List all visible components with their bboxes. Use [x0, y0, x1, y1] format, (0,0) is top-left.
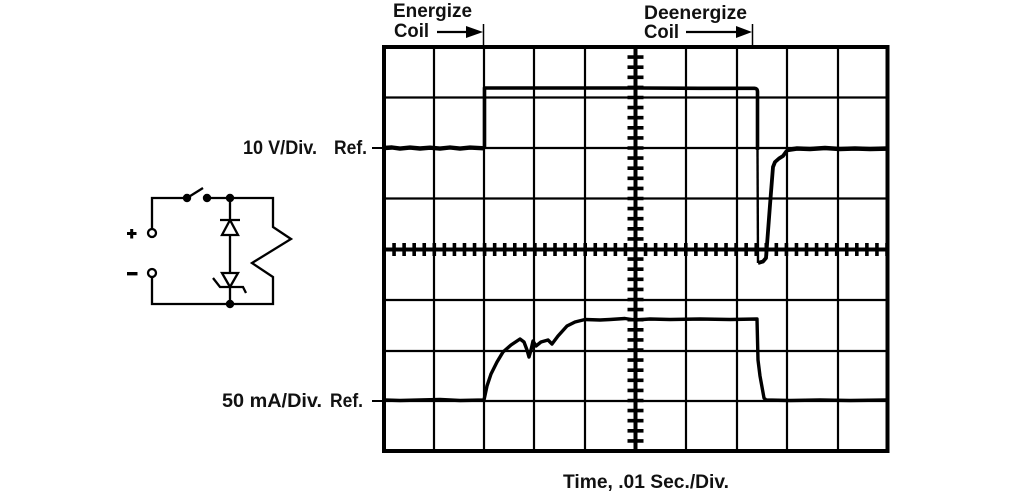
label: Deenergize Coil: Coil — [644, 22, 679, 43]
label: Energize Coil — [393, 1, 484, 47]
label: Energize Coil: Coil — [394, 21, 429, 42]
oscilloscope grid — [384, 47, 888, 451]
label: Energize Coil: Energize — [393, 1, 472, 22]
label: current reference — [222, 391, 384, 412]
label: current reference: Ref. — [330, 391, 363, 412]
label: voltage reference — [243, 138, 384, 159]
terminals — [148, 229, 156, 277]
label: time axis: Time, .01 Sec./Div. — [563, 472, 729, 493]
switch — [183, 188, 211, 202]
label: Deenergize Coil: Deenergize — [644, 3, 747, 24]
circuit diagram — [127, 188, 291, 308]
arrow: deenergize — [686, 24, 752, 47]
label: voltage reference: 10 V/Div. — [243, 138, 317, 159]
junction dots — [226, 194, 234, 308]
voltage trace — [384, 88, 887, 263]
current trace — [384, 318, 887, 400]
diode — [220, 220, 240, 235]
arrow: energize — [437, 24, 484, 47]
centre axes with ticks — [384, 47, 887, 451]
wiring — [152, 198, 291, 304]
label: voltage reference: Ref. — [334, 138, 367, 159]
label: current reference: 50 mA/Div. — [222, 391, 322, 412]
label: Deenergize Coil — [644, 3, 752, 47]
zener diode — [213, 273, 246, 293]
polarity labels — [127, 229, 138, 275]
